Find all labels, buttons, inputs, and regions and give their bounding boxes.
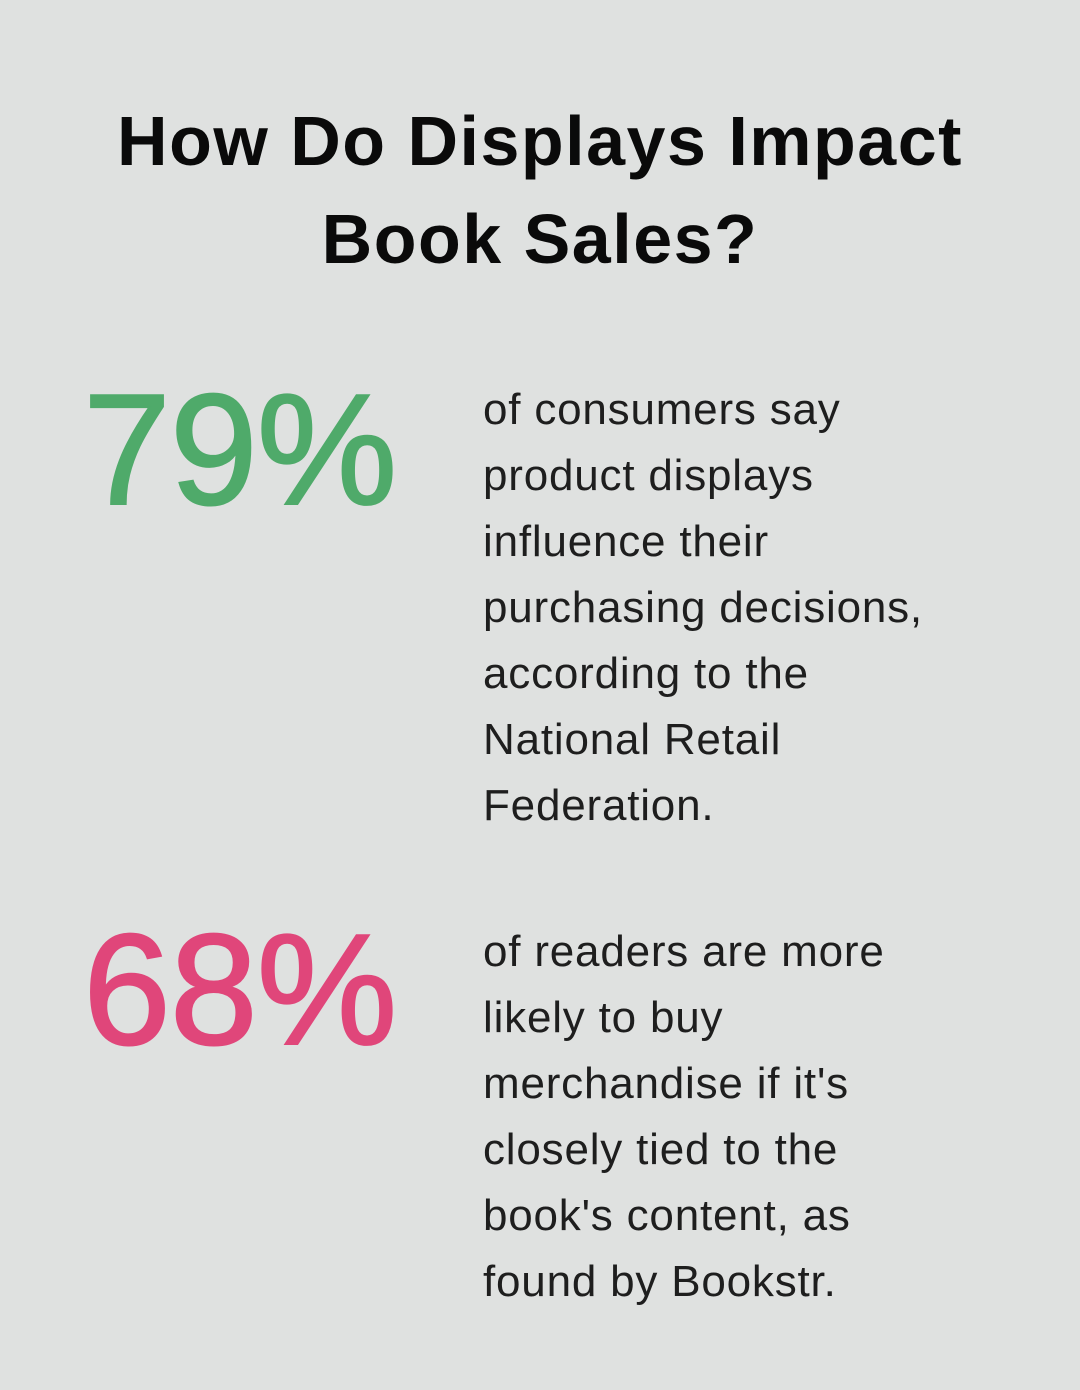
stat: 79%: 79%	[83, 362, 396, 538]
text: 68% description	[483, 927, 885, 1306]
text: 79% description: product displays	[483, 451, 814, 500]
text: 68% description: closely tied to the	[483, 1125, 838, 1174]
text: 79% description: National Retail	[483, 715, 781, 764]
text: 79% description: of consumers say	[483, 385, 841, 434]
text: 68% description: merchandise if it's	[483, 1059, 849, 1108]
text: 79% description	[483, 385, 923, 830]
title: How Do Displays Impact	[117, 102, 963, 180]
title: Book Sales?	[322, 200, 758, 278]
text: 79% description: influence their	[483, 517, 769, 566]
text: 68% description: book's content, as	[483, 1191, 851, 1240]
text: 68% description: of readers are more	[483, 927, 885, 976]
text: 68% description: found by Bookstr.	[483, 1257, 837, 1306]
text: 79% description: purchasing decisions,	[483, 583, 923, 632]
text: 79% description: Federation.	[483, 781, 714, 830]
stat: 68%: 68%	[83, 902, 396, 1078]
text: 68% description: likely to buy	[483, 993, 723, 1042]
title	[117, 102, 963, 278]
text: 79% description: according to the	[483, 649, 809, 698]
